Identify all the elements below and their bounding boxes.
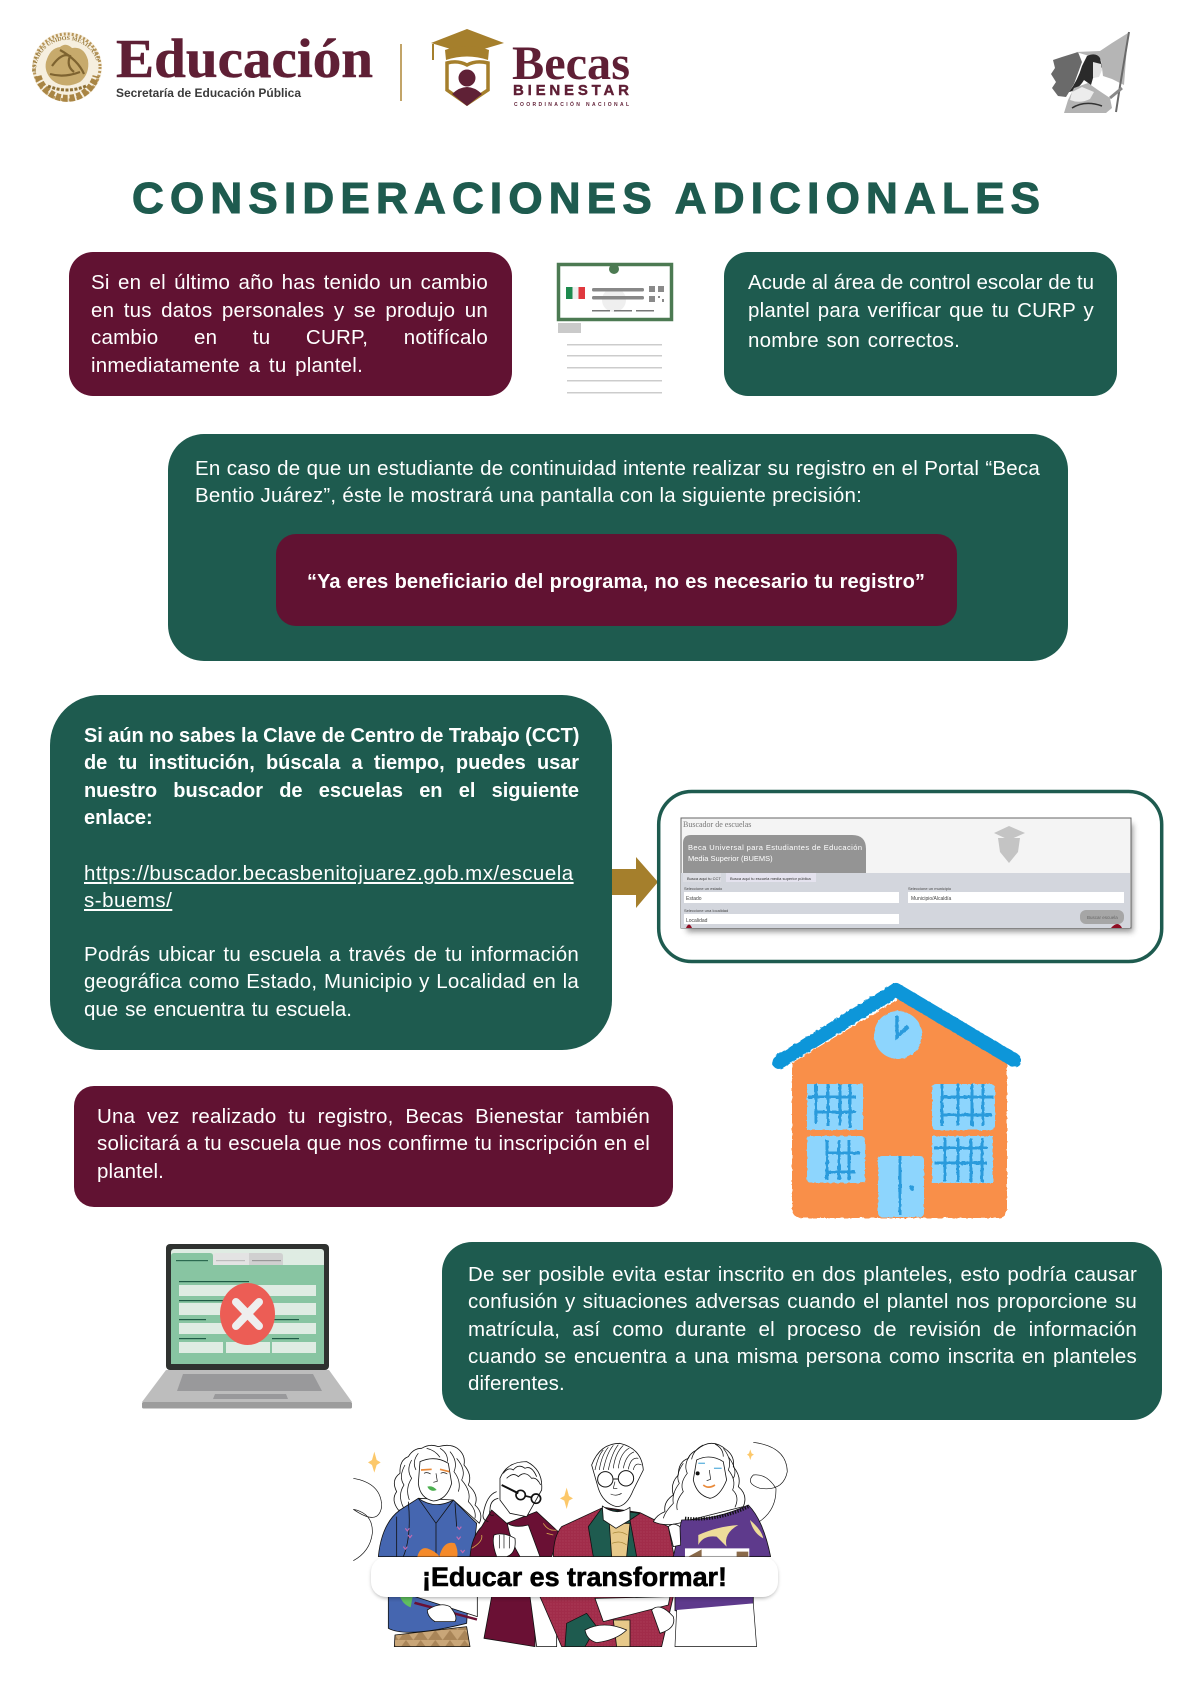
screenshot frame: school search: Busca aquí tu escuela media superior pública [730, 876, 811, 881]
student 2 [470, 1462, 560, 1647]
logo: Educación SEP seal and wordmark: Educación [116, 28, 373, 89]
text: solicitará a tu escuela que nos confirme tu inscripción en el [97, 1132, 650, 1155]
panel: school key search [50, 695, 612, 1050]
text: enlace: [84, 807, 153, 829]
banner shadow [372, 1559, 777, 1598]
text: confusión y situaciones adversas cuando el plantel nos proporcione su [468, 1290, 1137, 1313]
panel: continuing student notice [168, 434, 1068, 661]
logo: Educación SEP seal and wordmark [32, 28, 373, 102]
logo: Becas Bienestar: Becas [512, 37, 630, 90]
divider between logos [400, 44, 402, 101]
banner: Educar es transformar [371, 1557, 778, 1597]
text: Acude al área de control escolar de tu [748, 271, 1094, 294]
icon: CURP document [558, 264, 672, 394]
text: diferentes. [468, 1372, 565, 1395]
text: https://buscador.becasbenitojuarez.gob.mx/escuela [84, 862, 574, 885]
illustration: group of four students [353, 1442, 787, 1647]
arrow [612, 857, 658, 908]
text: inmediatamente a tu plantel. [91, 354, 363, 377]
student 3 [540, 1443, 674, 1647]
screenshot frame: school search: Seleccione un estado [684, 886, 723, 891]
text: Una vez realizado tu registro, Becas Bienestar también [97, 1105, 650, 1128]
callout: already a beneficiary: “Ya eres beneficiario del programa, no es necesario tu registro” [307, 571, 925, 593]
icon: laptop with error [142, 1244, 352, 1408]
screenshot frame: school search: Municipio/Alcaldía [911, 896, 952, 902]
callout: already a beneficiary [276, 534, 957, 626]
screenshot frame: school search: Busca aquí tu CCT [687, 876, 721, 881]
logo: Educación SEP seal and wordmark: Secretaría de Educación Pública [116, 88, 302, 100]
text: continuing student notice [195, 457, 1040, 507]
decorative swirls and sparkles [353, 1442, 787, 1561]
logo: Becas Bienestar: COORDINACIÓN NACIONAL [514, 100, 629, 108]
text: Si aún no sabes la Clave de Centro de Trabajo (CCT) [84, 725, 579, 747]
text: plantel para verificar que tu CURP y [748, 299, 1094, 322]
student 1 [378, 1445, 481, 1647]
text: s-buems/ [84, 889, 172, 912]
text: school key search [84, 725, 579, 1021]
text: Podrás ubicar tu escuela a través de tu información [84, 943, 579, 966]
text: personal data change [91, 271, 488, 377]
text: en tus datos personales y se produjo un [91, 299, 488, 322]
panel: personal data change [69, 252, 512, 396]
text: que se encuentra tu escuela. [84, 998, 352, 1021]
screenshot frame: school search: Estado [686, 896, 702, 902]
banner: Educar es transformar: ¡Educar es transformar! [422, 1562, 727, 1592]
text: nombre son correctos. [748, 329, 960, 352]
title: CONSIDERACIONES ADICIONALES [132, 174, 1040, 223]
screenshot frame: school search: Beca Universal para Estudiantes de Educación [688, 843, 862, 852]
screenshot frame: school search: Seleccione una localidad [684, 908, 728, 913]
icon: school building [779, 990, 1014, 1218]
text: matrícula, así como durante el proceso de revisión de información [468, 1318, 1137, 1341]
text: En caso de que un estudiante de continuidad intente realizar su registro en el Portal “Beca [195, 457, 1040, 480]
student 4 [653, 1443, 771, 1647]
text: geográfica como Estado, Municipio y Localidad en la [84, 970, 579, 993]
screenshot frame: school search: Localidad [686, 918, 708, 924]
text: avoid double enrolment [468, 1263, 1137, 1395]
text: cuando se encuentra a una misma persona como inscrita en planteles [468, 1345, 1137, 1368]
logo: Becas Bienestar: BIENESTAR [513, 82, 629, 99]
panel: avoid double enrolment [442, 1242, 1162, 1420]
screenshot frame: school search: Buscador de escuelas [683, 820, 751, 829]
screenshot frame: school search: Seleccione un municipio [908, 886, 952, 891]
text: de tu institución, búscala a tiempo, puedes usar [84, 752, 579, 774]
screenshot frame: school search [659, 792, 1162, 962]
screenshot frame: school search: Buscar escuela [1087, 915, 1118, 920]
text: Bentio Juárez”, éste le mostrará una pantalla con la siguiente precisión: [195, 484, 862, 507]
text: school confirmation [97, 1105, 650, 1183]
text: nuestro buscador de escuelas en el siguiente [84, 780, 579, 802]
logo: Becas Bienestar [431, 29, 630, 108]
text: De ser posible evita estar inscrito en dos planteles, esto podría causar [468, 1263, 1137, 1286]
text: Si en el último año has tenido un cambio [91, 271, 488, 294]
panel: school confirmation [74, 1086, 673, 1207]
text: verify CURP [748, 271, 1094, 352]
icon: woman holding flag [1051, 32, 1129, 113]
panel: verify CURP [724, 252, 1117, 396]
text: cambio en tu CURP, notifícalo [91, 326, 488, 349]
screenshot frame: school search: Media Superior (BUEMS) [688, 854, 773, 863]
text: plantel. [97, 1160, 164, 1183]
